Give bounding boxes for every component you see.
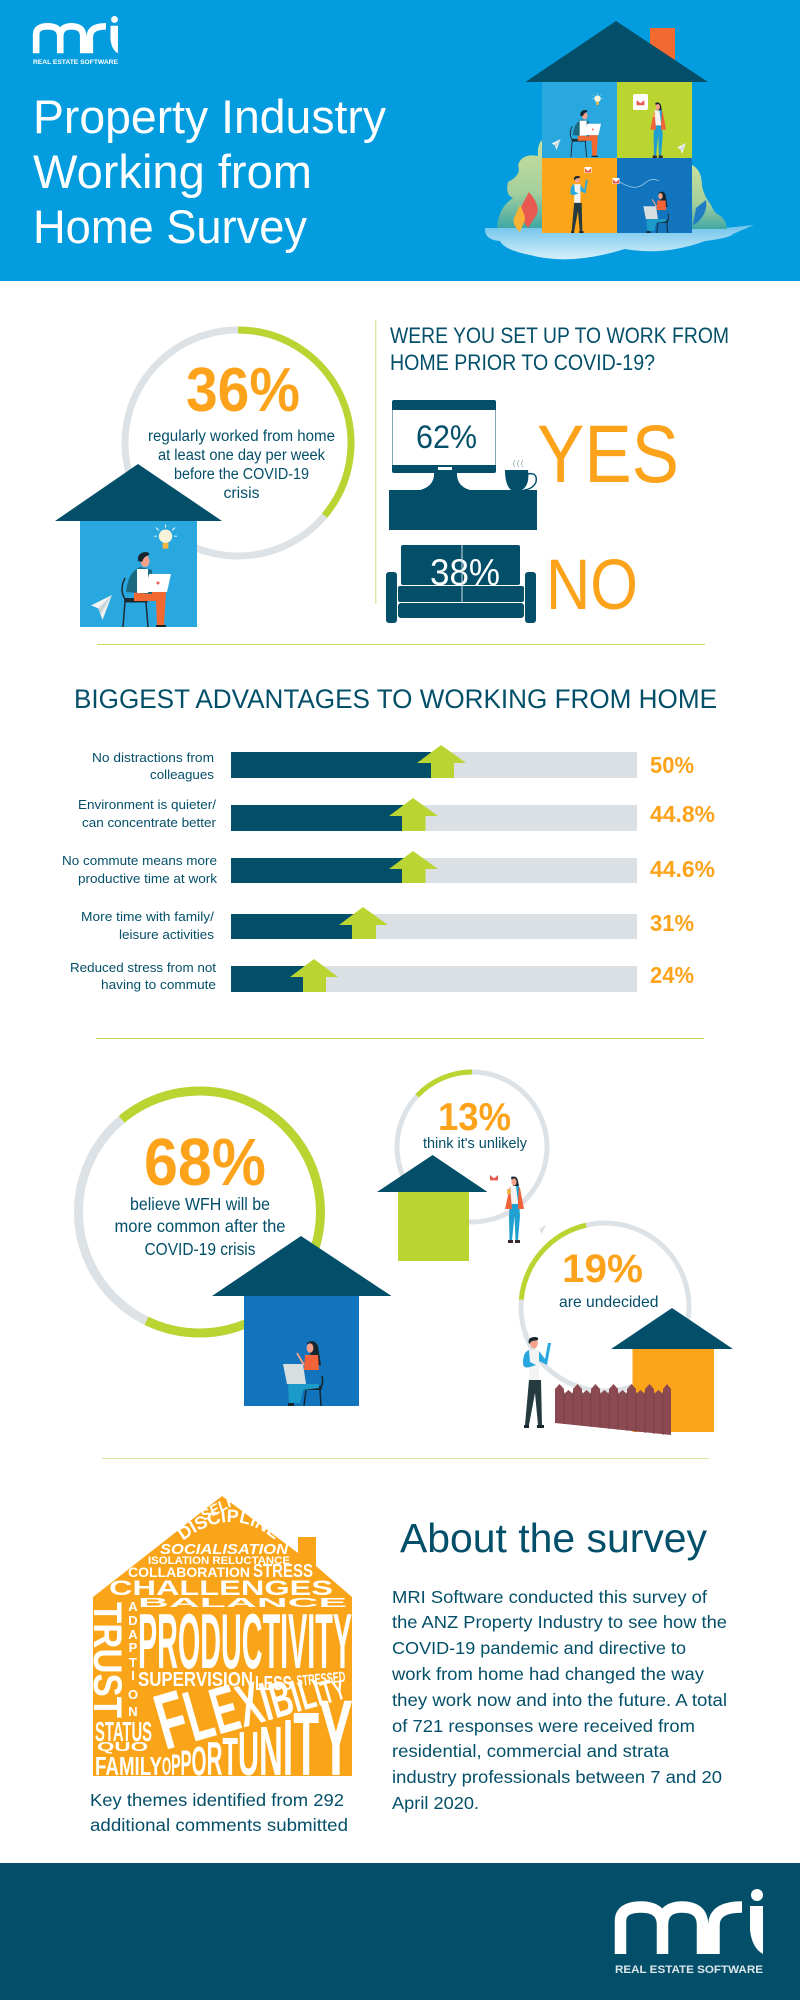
stat: 36%: 36% [186,356,300,425]
text: about paragraph: COVID-19 pandemic and directive to [392,1638,686,1658]
heading: about the survey: About the survey [400,1515,707,1561]
text: believe WFH: more common after the [114,1216,286,1236]
label: NO: NO [546,546,638,625]
heading: set up question: WERE YOU SET UP TO WORK FROM [390,323,729,348]
title: Home Survey [33,200,307,253]
header banner [0,0,800,281]
text: PRODUCTIVITY [138,1597,352,1685]
footer band [0,1863,800,2000]
word cloud house: ISOLATION RELUCTANCE [148,1555,290,1567]
caption: key themes [90,1790,348,1835]
ring: 13 percent [397,1072,547,1222]
heading: set up question [390,323,729,375]
label: YES: YES [537,409,679,500]
bar row: no distractions: No distractions from [92,750,214,765]
title: Working from [33,145,312,198]
icon: blue house with woman [212,1236,392,1406]
text: description: crisis [224,485,260,502]
icon: house with man at laptop [55,464,222,627]
stat: 68%: 68% [144,1125,266,1200]
bar row: quieter environment: 44.8% [650,801,715,827]
word cloud house: DISCIPLINE [178,1510,276,1540]
text: about paragraph [391,1587,727,1813]
ring: 68 percent [78,1091,320,1333]
bar row: quieter environment: Environment is quieter/ [78,797,216,812]
bar row: reduced stress: Reduced stress from not [70,960,216,975]
word cloud house: ADAPTION [128,1599,138,1719]
word cloud house: FAMILY [95,1751,162,1781]
text: undecided: are undecided [559,1294,658,1311]
text: about paragraph: industry professionals between 7 and 20 [392,1767,722,1787]
icon: coffee cup [505,460,536,490]
divider [97,644,705,645]
bar row: no commute: 44.6% [650,856,715,882]
bar row: no distractions [92,745,694,782]
word cloud house: STATUS [95,1716,152,1747]
text: about paragraph: residential, commercial and strata [392,1741,669,1761]
word cloud house: QUO [97,1739,148,1754]
bar row: reduced stress: having to commute [101,977,216,992]
bar row: no commute [62,851,715,886]
word cloud house: STRESSED [296,1669,346,1690]
bar row: family time: leisure activities [119,927,215,942]
icon: green house [377,1155,488,1261]
bar row: no distractions: colleagues [150,767,215,782]
title [33,90,386,253]
text: about paragraph: they work now and into the future. A total [392,1690,727,1710]
heading: biggest advantages: BIGGEST ADVANTAGES TO WORKING FROM HOME [74,684,717,714]
bar row: no commute: productive time at work [78,871,218,886]
text: believe WFH [114,1194,286,1259]
icon: sofa 38% [386,545,536,623]
word cloud house: TRUST [85,1602,129,1718]
icon: fence [555,1384,671,1435]
text: believe WFH: COVID-19 crisis [144,1239,256,1259]
ring: 19 percent [521,1223,689,1391]
text: about paragraph: the ANZ Property Industry to see how the [392,1612,727,1632]
word cloud house: CHALLENGES [109,1577,333,1600]
divider [96,1038,704,1039]
logo: MRI [33,16,118,66]
divider [102,1458,709,1459]
text: about paragraph: April 2020. [392,1793,479,1813]
bar row: reduced stress [70,959,694,992]
bar row: no distractions: 50% [650,752,694,778]
word cloud house [85,1492,353,1798]
bar row: family time: More time with family/ [81,909,214,924]
logo: MRI footer [615,1889,763,1976]
bar row: reduced stress: 24% [650,962,694,988]
text: believe WFH: believe WFH will be [130,1194,270,1214]
bar row: family time: 31% [650,910,694,936]
text: about paragraph: work from home had changed the way [391,1664,704,1684]
bar row: quieter environment: can concentrate better [82,815,217,830]
text: description: at least one day per week [158,447,325,464]
logo: MRI footer: REAL ESTATE SOFTWARE [615,1964,763,1976]
panel: 68% more common [78,1091,392,1406]
word cloud house: FLEXIBILITY [145,1629,352,1766]
bar chart: advantages [62,745,715,992]
icon: orange house [611,1308,733,1432]
title: Property Industry [33,90,386,143]
illustration: four-room house [485,21,754,259]
text: unlikely: think it's unlikely [423,1135,527,1152]
divider: vertical [375,320,376,604]
panel: 36% worked from home [55,330,351,627]
bar row: no commute: No commute means more [62,853,217,868]
word cloud house: BALANCE [138,1595,348,1610]
text: description: before the COVID-19 [174,466,309,483]
word cloud house: COLLABORATION [128,1564,250,1580]
text: description: regularly worked from home [148,428,335,445]
panel: 13% unlikely [377,1072,547,1261]
word cloud house: SELF [198,1492,239,1525]
stat: 19%: 19% [562,1247,643,1291]
word cloud house: STRESS [253,1561,313,1581]
icon: monitor on desk 62% [389,400,537,530]
bar row: quieter environment [78,797,715,831]
ring: 36 percent [125,330,351,556]
icon: monitor on desk 62%: 62% [416,419,477,455]
word cloud house: SUPERVISION [138,1669,253,1691]
word cloud house: SOCIALISATION [160,1541,289,1558]
icon: woman with phone [489,1173,546,1243]
word cloud house: OPPORTUNITY [162,1678,353,1798]
caption: key themes: Key themes identified from 292 [90,1790,344,1810]
text: about paragraph: of 721 responses were received from [392,1716,695,1736]
word cloud house: LESS [255,1673,292,1695]
panel: 19% undecided [521,1223,733,1435]
text: description [148,428,335,502]
caption: key themes: additional comments submitted [90,1815,348,1835]
text: about paragraph: MRI Software conducted this survey of [392,1587,707,1607]
bar row: family time [81,907,694,942]
icon: man standing [523,1337,551,1428]
stat: 13%: 13% [438,1096,511,1139]
icon: sofa 38%: 38% [430,552,500,593]
logo: MRI: REAL ESTATE SOFTWARE [33,59,118,66]
heading: set up question: HOME PRIOR TO COVID-19? [390,350,655,375]
